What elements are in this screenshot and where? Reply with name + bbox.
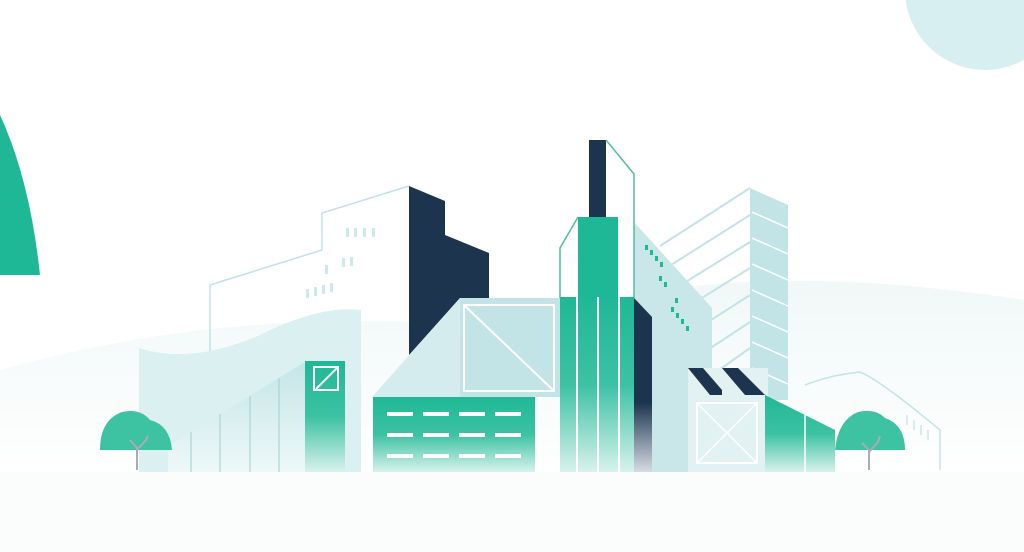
ground <box>0 472 1024 552</box>
center roof house <box>372 298 560 397</box>
decorative circle top right <box>905 0 1024 70</box>
green leaf shape left <box>0 115 40 275</box>
tree right <box>835 411 905 470</box>
background hills <box>0 281 1024 480</box>
factory <box>688 368 835 472</box>
right outline building <box>805 372 940 470</box>
central tower <box>560 140 652 472</box>
green block with windows <box>373 397 535 472</box>
light building behind tower <box>634 222 712 472</box>
green tower left <box>305 361 345 472</box>
slanted front wall <box>168 362 305 472</box>
dark building <box>409 186 489 355</box>
tall right facade building <box>660 188 788 400</box>
left outline building <box>210 186 409 352</box>
tree left <box>100 411 172 470</box>
wavy light building <box>139 309 361 472</box>
